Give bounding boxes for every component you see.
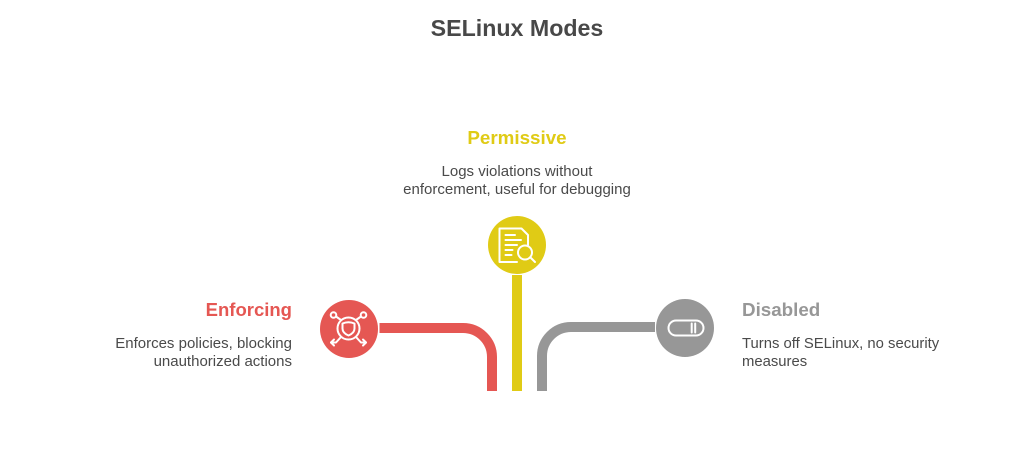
text: Enforcing description: Enforces policies, blocking bbox=[115, 335, 292, 352]
text: Disabled description: measures bbox=[742, 354, 807, 370]
text: Enforcing description: unauthorized actions bbox=[154, 353, 292, 370]
connector: Permissive bbox=[512, 275, 522, 391]
heading: Enforcing: Enforcing bbox=[206, 299, 292, 320]
connector: Disabled bbox=[542, 327, 655, 391]
connector: Enforcing bbox=[380, 328, 492, 391]
heading: Disabled: Disabled bbox=[742, 299, 820, 320]
text: Disabled description bbox=[742, 336, 940, 370]
text: Permissive description: enforcement, useful for debugging bbox=[403, 181, 631, 198]
icon: Disabled toggle bbox=[656, 299, 714, 357]
heading: Permissive: Permissive bbox=[467, 127, 567, 148]
text: Permissive description: Logs violations without bbox=[442, 163, 592, 180]
text: Disabled description: Turns off SELinux, no security bbox=[742, 336, 939, 352]
text: Enforcing description bbox=[115, 335, 292, 370]
text: Permissive description bbox=[403, 163, 631, 198]
icon: Enforcing shield network bbox=[320, 300, 378, 358]
title: SELinux Modes bbox=[431, 15, 603, 41]
icon: Permissive document search bbox=[488, 216, 546, 274]
